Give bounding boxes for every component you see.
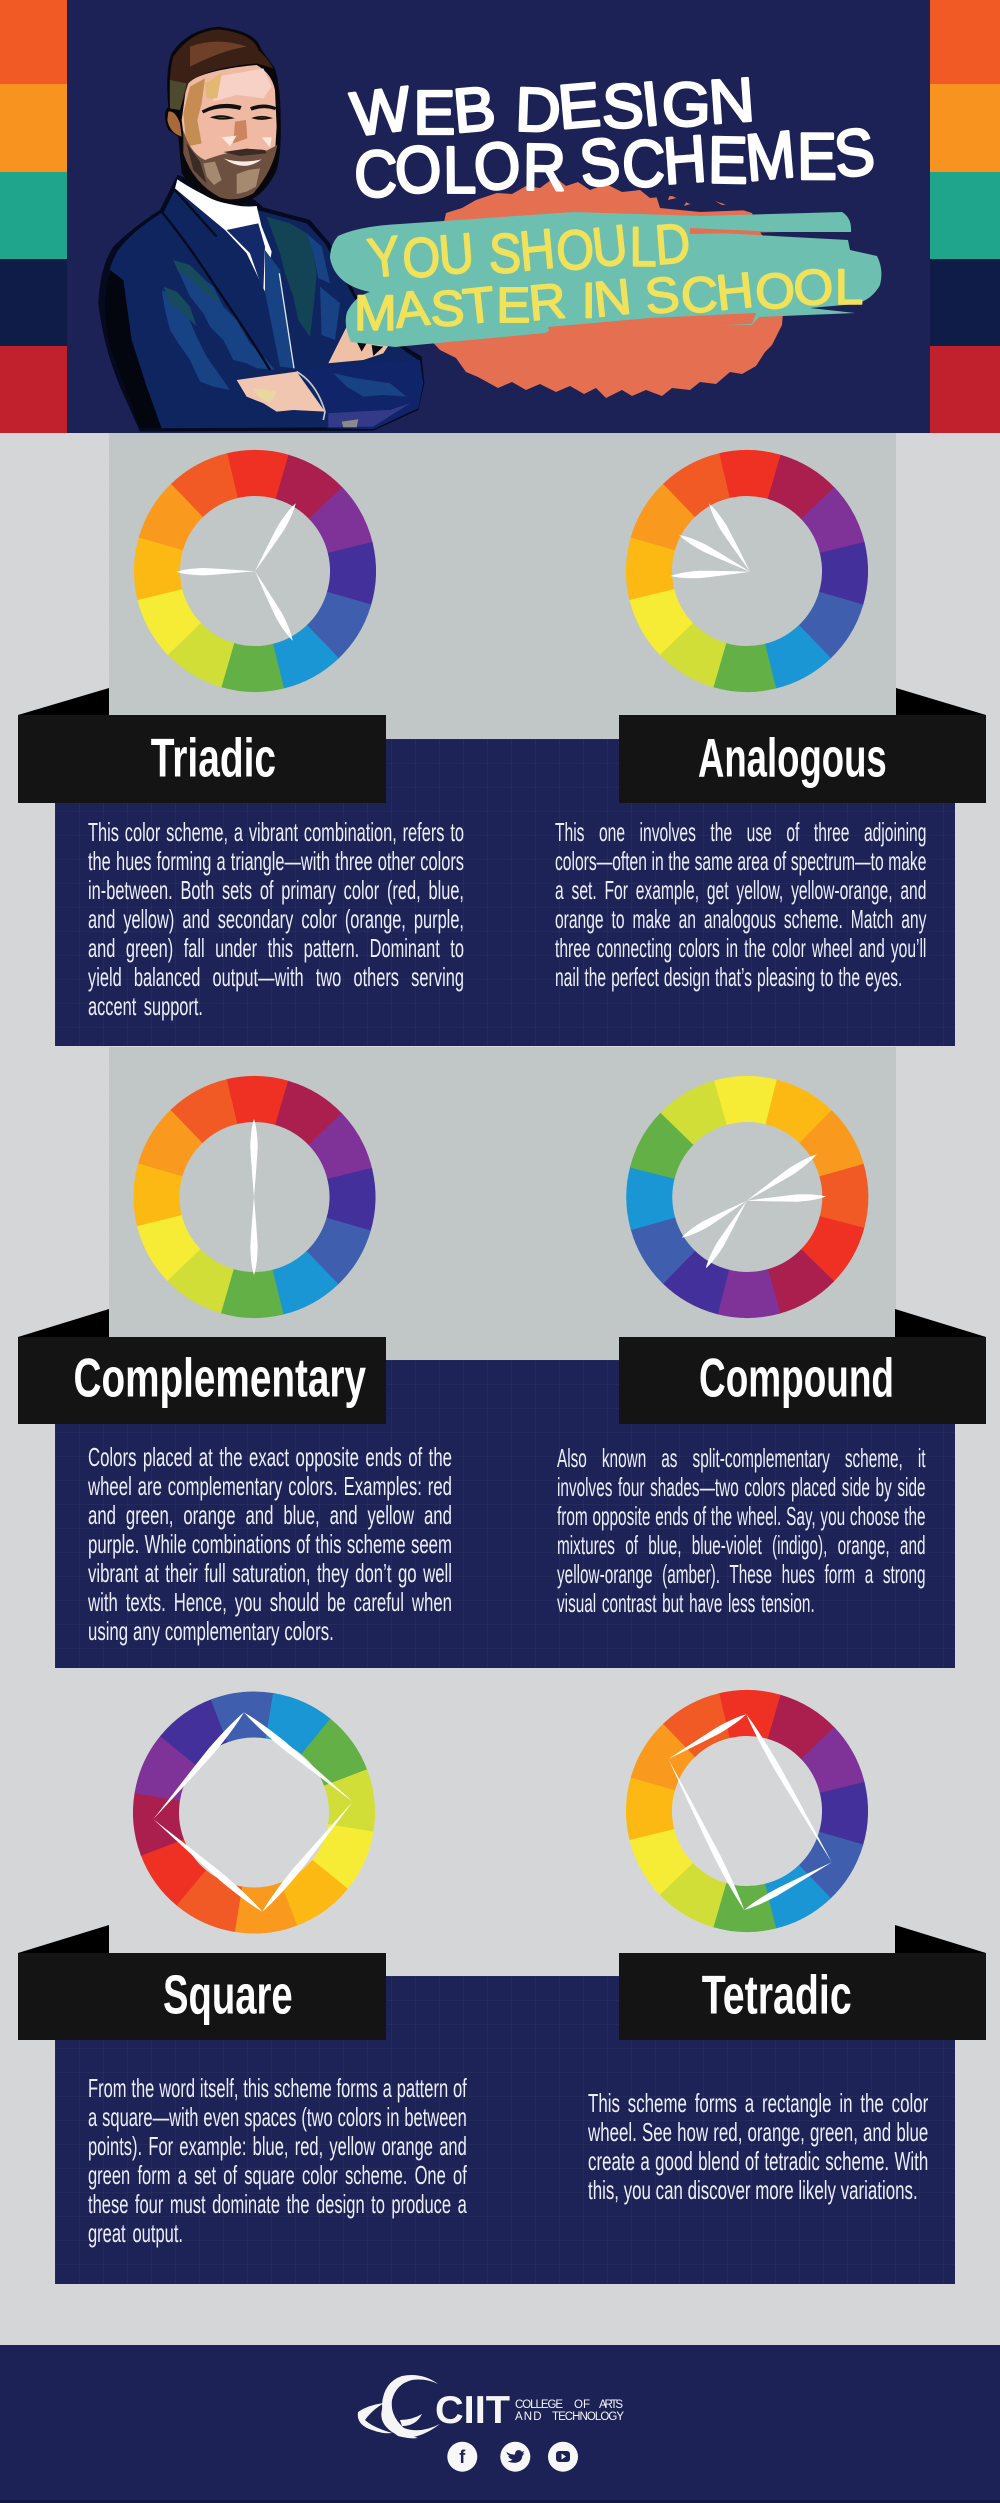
panel: analogous	[555, 450, 986, 992]
subtitle	[351, 210, 866, 343]
panel: square	[18, 1692, 467, 2248]
text block: triadic: and green) fall under this pattern. Dominant to	[88, 932, 464, 962]
text block: analogous: nail the perfect design that’s pleasing to the eyes.	[555, 962, 903, 992]
text block: triadic: accent support.	[88, 990, 203, 1020]
icon: square colour wheel	[18, 1577, 490, 2048]
panel: complementary	[18, 1076, 452, 1646]
icon: compound colour wheel	[520, 970, 975, 1424]
text block: square	[88, 2073, 467, 2248]
text block: square: points). For example: blue, red, yellow orange and	[88, 2131, 467, 2161]
icon: tetradic colour wheel	[579, 1643, 915, 1979]
icon: youtube	[548, 2442, 578, 2472]
text block: analogous: a set. For example, get yellow, yellow-orange, and	[555, 874, 927, 904]
text block: tetradic: This scheme forms a rectangle in the color	[588, 2088, 928, 2118]
text block: compound	[557, 1442, 926, 1618]
navy card row 3	[55, 1976, 955, 2284]
text block: square: green form a set of square color scheme. One of	[88, 2160, 467, 2190]
heading banner: Compound: Compound	[699, 1347, 894, 1409]
heading banner: Compound	[619, 1309, 986, 1424]
heading banner: Triadic: Triadic	[151, 727, 276, 789]
panel: triadic	[18, 450, 464, 1020]
subtitle: MASTER IN SCHOOL	[351, 255, 866, 343]
text block: compound: Also known as split-complementary scheme, it	[557, 1442, 925, 1472]
text block: square: From the word itself, this scheme forms a pattern of	[88, 2073, 467, 2103]
text block: square: a square—with even spaces (two colors in between	[88, 2102, 467, 2132]
text block: complementary: wheel are complementary colors. Examples: red	[88, 1470, 452, 1500]
text block: square: these four must dominate the design to produce a	[88, 2189, 467, 2219]
text block: analogous: three connecting colors in the color wheel and you’ll	[555, 932, 927, 962]
left colour stripes	[0, 0, 67, 433]
heading banner: Square: Square	[163, 1963, 293, 2025]
title	[347, 62, 878, 212]
text block: tetradic: this, you can discover more likely variations.	[588, 2175, 918, 2205]
text block: complementary: using any complementary colors.	[88, 1616, 334, 1646]
text block: triadic	[88, 816, 464, 1020]
text block: triadic: yield balanced output—with two others serving	[88, 962, 464, 992]
logo: CIIT: CIIT	[435, 2389, 510, 2432]
logo: CIIT	[358, 2375, 624, 2438]
grey backdrop row 2	[109, 1047, 896, 1360]
navy card row 1	[55, 739, 955, 1046]
heading banner: Analogous	[619, 688, 986, 803]
heading banner: Complementary	[18, 1309, 386, 1424]
illustration: man in blue suit	[98, 27, 424, 432]
heading banner: Triadic	[18, 688, 386, 803]
logo: CIIT: ARTS	[599, 2399, 623, 2411]
grey backdrop row 1	[109, 433, 896, 739]
heading banner: Square	[18, 1925, 386, 2040]
icon: analogous colour wheel	[579, 403, 915, 739]
text block: triadic: in-between. Both sets of primary color (red, blue,	[88, 874, 464, 904]
title: COLOR SCHEMES	[351, 113, 878, 212]
heading banner: Analogous: Analogous	[698, 727, 887, 789]
logo: CIIT: COLLEGE	[515, 2399, 563, 2411]
text block: tetradic: create a good blend of tetradic scheme. With	[588, 2146, 928, 2176]
text block: analogous	[555, 816, 927, 992]
text block: compound: mixtures of blue, blue-violet (indigo), orange, and	[557, 1530, 925, 1560]
text block: triadic: This color scheme, a vibrant combination, refers to	[88, 816, 464, 846]
heading banner: Tetradic	[619, 1925, 986, 2040]
text block: complementary: with texts. Hence, you should be careful when	[88, 1586, 452, 1616]
text block: tetradic: wheel. See how red, orange, green, and blue	[588, 2117, 928, 2147]
panel: tetradic	[588, 1690, 986, 2205]
text block: triadic: the hues forming a triangle—with three other colors	[88, 846, 464, 876]
icon: triadic colour wheel	[87, 403, 423, 739]
text block: tetradic	[588, 2088, 928, 2205]
right colour stripes	[930, 0, 1000, 433]
text block: complementary: and green, orange and blue, and yellow and	[88, 1500, 452, 1530]
navy card row 2	[55, 1360, 955, 1668]
title: WEB DESIGN	[347, 62, 757, 153]
text block: compound: visual contrast but have less tension.	[557, 1588, 815, 1618]
icon: complementary colour wheel	[86, 1029, 423, 1365]
text block: compound: from opposite ends of the wheel. Say, you choose the	[557, 1500, 925, 1530]
text block: complementary: Colors placed at the exact opposite ends of the	[88, 1442, 452, 1472]
header banner	[0, 0, 1000, 433]
logo: CIIT: AND	[515, 2411, 542, 2423]
footer	[0, 2345, 1000, 2503]
text block: complementary: vibrant at their full saturation, they don’t go well	[88, 1558, 452, 1588]
text block: complementary	[88, 1442, 452, 1646]
icon: twitter	[500, 2442, 530, 2472]
heading banner: Complementary: Complementary	[74, 1347, 366, 1409]
text block: triadic: and yellow) and secondary color (orange, purple,	[88, 904, 464, 934]
teal brush stroke	[330, 212, 881, 347]
text block: complementary: purple. While combinations of this scheme seem	[88, 1528, 452, 1558]
orange paint blob	[424, 177, 784, 398]
text block: analogous: orange to make an analogous scheme. Match any	[555, 904, 927, 934]
text block: analogous: colors—often in the same area of spectrum—to make	[555, 846, 927, 876]
text block: square: great output.	[88, 2218, 183, 2248]
heading banner: Tetradic: Tetradic	[702, 1963, 852, 2025]
icon: facebook: f	[459, 2447, 466, 2467]
logo: CIIT: TECHNOLOGY	[552, 2411, 624, 2423]
panel: compound	[557, 1076, 986, 1618]
icon: facebook	[447, 2442, 477, 2472]
subtitle: YOU SHOULD	[364, 210, 693, 292]
text block: compound: involves four shades—two colors placed side by side	[557, 1472, 925, 1502]
text block: compound: yellow-orange (amber). These hues form a strong	[557, 1558, 925, 1588]
text block: analogous: This one involves the use of three adjoining	[555, 816, 927, 846]
logo: CIIT: OF	[574, 2399, 590, 2411]
